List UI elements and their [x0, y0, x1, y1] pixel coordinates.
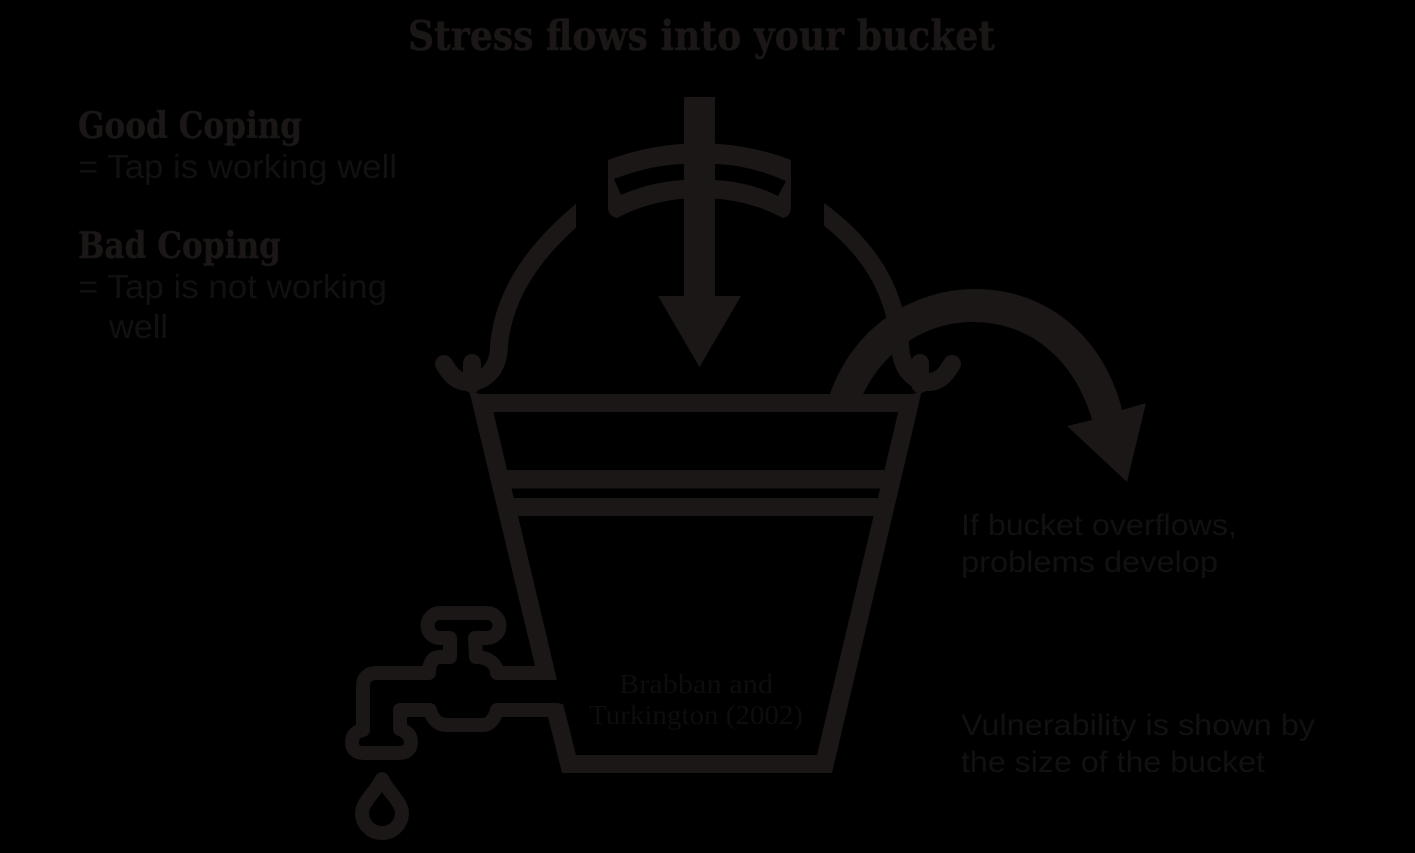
- arrow: stress flowing in: [658, 97, 741, 367]
- text: vulnerability caption: [961, 709, 1315, 779]
- right wall and base: [548, 390, 922, 773]
- icon: bucket: [444, 143, 952, 773]
- legend: coping text block: [78, 105, 397, 345]
- text: citation: Turkington (2002): [589, 700, 803, 730]
- icon: tap: [352, 613, 557, 753]
- left wall upper: [469, 390, 557, 680]
- text: tap is not working well: = Tap is not working: [78, 268, 387, 305]
- arrow: overflow: [830, 289, 1146, 482]
- text: overflow caption: problems develop: [961, 546, 1218, 579]
- text: tap is not working well: [78, 268, 387, 345]
- bands: [500, 470, 890, 488]
- heading: good coping: Good Coping: [78, 105, 302, 147]
- text: citation: [589, 669, 803, 730]
- icon: water drop: [362, 779, 402, 833]
- bucket handle and hooks: [444, 204, 952, 384]
- text: overflow caption: If bucket overflows,: [961, 509, 1237, 542]
- title: Stress flows into your bucket: [408, 12, 995, 60]
- rim: [475, 394, 917, 412]
- text: tap is working well: = Tap is working well: [78, 148, 397, 185]
- text: vulnerability caption: the size of the bucket: [961, 746, 1266, 779]
- text: overflow caption: [961, 509, 1237, 579]
- text: tap is not working well: well: [108, 308, 168, 345]
- heading: bad coping: Bad Coping: [78, 225, 281, 267]
- text: citation: Brabban and: [619, 669, 774, 699]
- handle grip: [608, 143, 791, 218]
- text: vulnerability caption: Vulnerability is shown by: [961, 709, 1315, 742]
